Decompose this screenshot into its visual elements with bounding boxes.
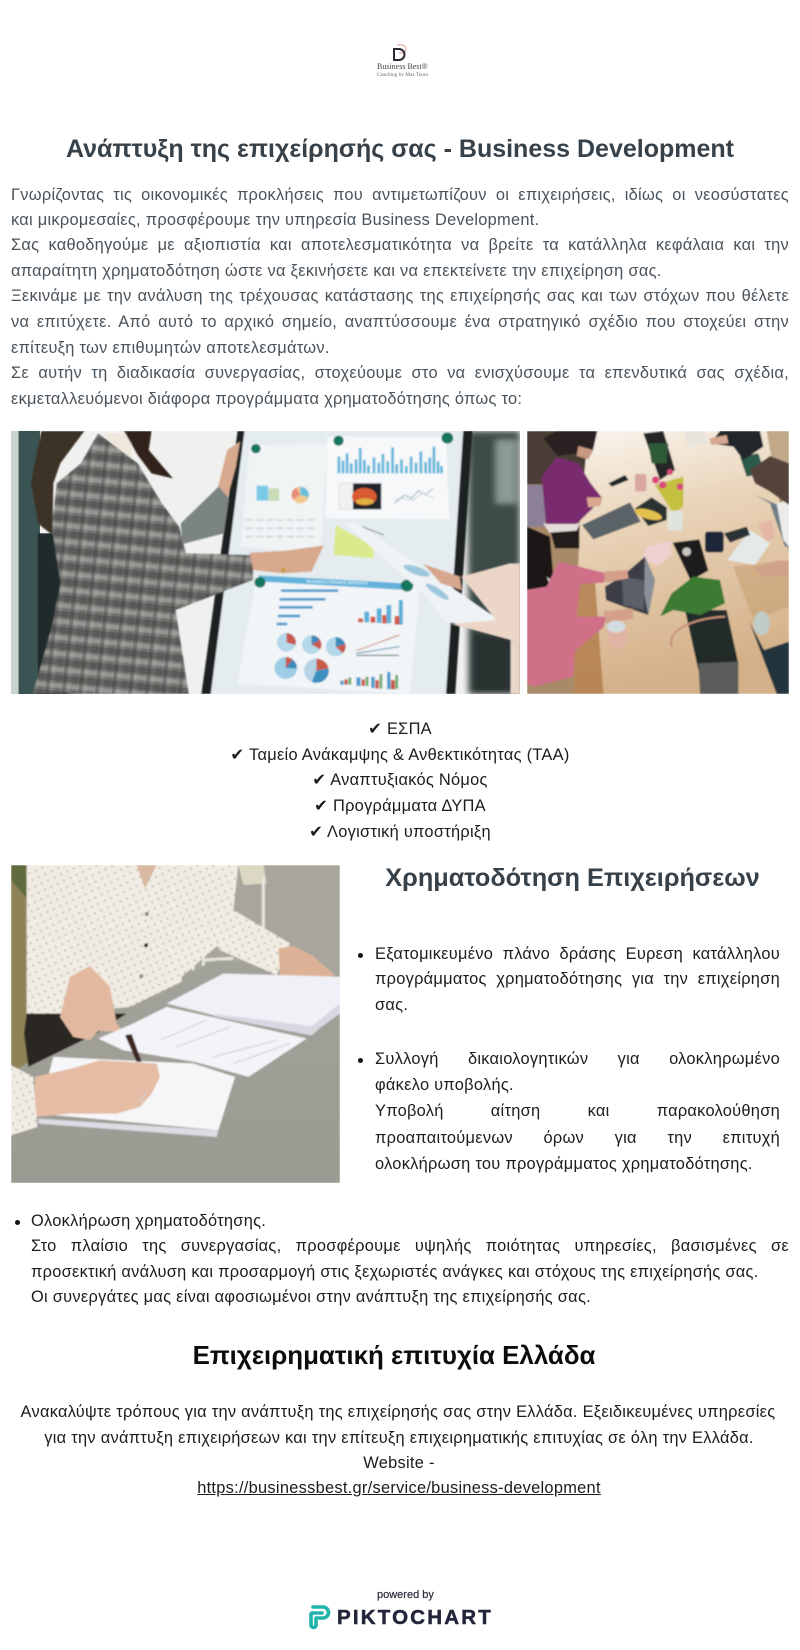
intro text block: Σας καθοδηγούμε με αξιοπιστία και αποτελεσματικότητα να βρείτε τα κατάλληλα κεφάλαια και την [11, 236, 789, 254]
checklist of funding programmes: ✔ Προγράμματα ΔΥΠΑ [314, 797, 486, 815]
items on the table [582, 502, 641, 539]
service list beside photo: Συλλογή δικαιολογητικών για ολοκληρωμένο [375, 1050, 780, 1068]
completion bullet text block: Οι συνεργάτες μας είναι αφοσιωμένοι στην ανάπτυξη της επιχείρησής σας. [31, 1288, 591, 1306]
intro text block: και μικρομεσαίες, προσφέρουμε την υπηρεσία Business Development. [11, 211, 539, 229]
closing text with website link: Ανακαλύψτε τρόπους για την ανάπτυξη της επιχείρησής σας στην Ελλάδα. Εξειδικευμένες υπηρεσίες [21, 1403, 775, 1421]
paper stacks [167, 973, 340, 1035]
heading: business funding: Χρηματοδότηση Επιχειρήσεων [385, 864, 760, 892]
footer: powered by Piktochart [309, 1589, 493, 1630]
service list beside photo [358, 945, 780, 1173]
checklist of funding programmes: ✔ Ταμείο Ανάκαμψης & Ανθεκτικότητας (ΤΑΑ) [230, 746, 570, 764]
checklist of funding programmes [230, 720, 570, 841]
checklist of funding programmes: ✔ Λογιστική υποστήριξη [309, 823, 491, 841]
closing text with website link [20, 1403, 775, 1497]
pink jacket woman with laptop [605, 557, 655, 615]
service list beside photo: σας. [375, 996, 408, 1014]
completion bullet text block: Στο πλαίσιο της συνεργασίας, προσφέρουμε υψηλής ποιότητας υπηρεσίες, βασισμένες σε [31, 1237, 789, 1255]
checklist of funding programmes: ✔ Αναπτυξιακός Νόμος [312, 771, 488, 789]
service list beside photo: προγράμματος χρηματοδότησης για την επιχείρηση [375, 970, 780, 988]
heading: business success Greece: Επιχειρηματική επιτυχία Ελλάδα [193, 1342, 595, 1370]
photo: signing documents at a desk [11, 865, 340, 1183]
board frame and surface [201, 431, 472, 694]
photo: team working around a wooden table [527, 431, 789, 694]
service list beside photo: Υποβολή αίτηση και παρακολούθηση [375, 1102, 780, 1120]
service list beside photo: ολοκλήρωση του προγράμματος χρηματοδότησης. [375, 1155, 753, 1173]
second person and tablet [344, 522, 499, 627]
intro text block: να επιτύχετε. Από αυτό το αρχικό σημείο, αναπτύσσουμε ένα στρατηγικό σχέδιο που στοχεύει στην [11, 313, 789, 331]
intro text block: απαραίτητη χρηματοδότηση ώστε να ξεκινήσετε και να επεκτείνετε την επιχείρηση σας. [11, 262, 662, 280]
checklist of funding programmes: ✔ ΕΣΠΑ [368, 720, 432, 738]
closing text with website link: Website - [363, 1454, 435, 1472]
photo: business finance board presentation: BUSINESS FINANCE REPORTS [306, 579, 368, 586]
laptop bottom right [749, 622, 789, 694]
service list beside photo: προαπαιτούμενων όρων για την επιτυχή [375, 1129, 780, 1147]
footer: powered by Piktochart: PIKTOCHART [337, 1606, 493, 1629]
left woman in purple [527, 485, 545, 527]
intro text block: εκμεταλλευόμενοι διάφορα προγράμματα χρηματοδότησης όπως το: [11, 390, 522, 408]
top woman arm [710, 431, 763, 460]
completion bullet text block [15, 1212, 789, 1306]
closing text with website link: για την ανάπτυξη επιχειρήσεων και την επίτευξη επιχειρηματικής επιτυχίας σε όλη την Ελλάδα. [44, 1429, 754, 1447]
intro text block [11, 186, 789, 408]
footer: powered by Piktochart: powered by [377, 1589, 434, 1601]
closing text with website link: https://businessbest.gr/service/business-development [197, 1479, 601, 1497]
logo: Business Best: Coaching by Max Tsura [377, 72, 428, 78]
completion bullet text block: Ολοκλήρωση χρηματοδότησης. [31, 1212, 266, 1230]
right woman [740, 453, 765, 477]
intro text block: Ξεκινάμε με την ανάλυση της τρέχουσας κατάστασης της επιχείρησής σας και των στόχων που θέλετε [11, 287, 789, 305]
intro text block: Σε αυτήν τη διαδικασία συνεργασίας, στοχεύουμε στο να ενισχύσουμε τα επενδυτικά σας σχέδια, [11, 364, 789, 382]
completion bullet text block: προσεκτική ανάλυση και προσαρμογή στις ξεχωριστές ανάγκες και στόχους της επιχείρησής σας. [31, 1263, 759, 1281]
intro text block: επίτευξη των επιθυμητών αποτελεσμάτων. [11, 339, 330, 357]
photo: business finance board presentation [11, 431, 520, 694]
notebook [38, 1057, 235, 1130]
service list beside photo: φάκελο υποβολής. [375, 1076, 514, 1094]
intro text block: Γνωρίζοντας τις οικονομικές προκλήσεις που αντιμετωπίζουν οι επιχειρήσεις, ιδίως οι νεοσύστατες [11, 186, 789, 204]
plant and runner [685, 610, 738, 670]
service list beside photo: Εξατομικευμένο πλάνο δράσης Ευρεση κατάλληλου [375, 945, 780, 963]
logo: Business Best: Business Best® [377, 62, 428, 71]
logo: Business Best [377, 44, 428, 78]
presenter [218, 442, 240, 498]
title: Ανάπτυξη της επιχείρησής σας - Business Development [66, 135, 734, 163]
